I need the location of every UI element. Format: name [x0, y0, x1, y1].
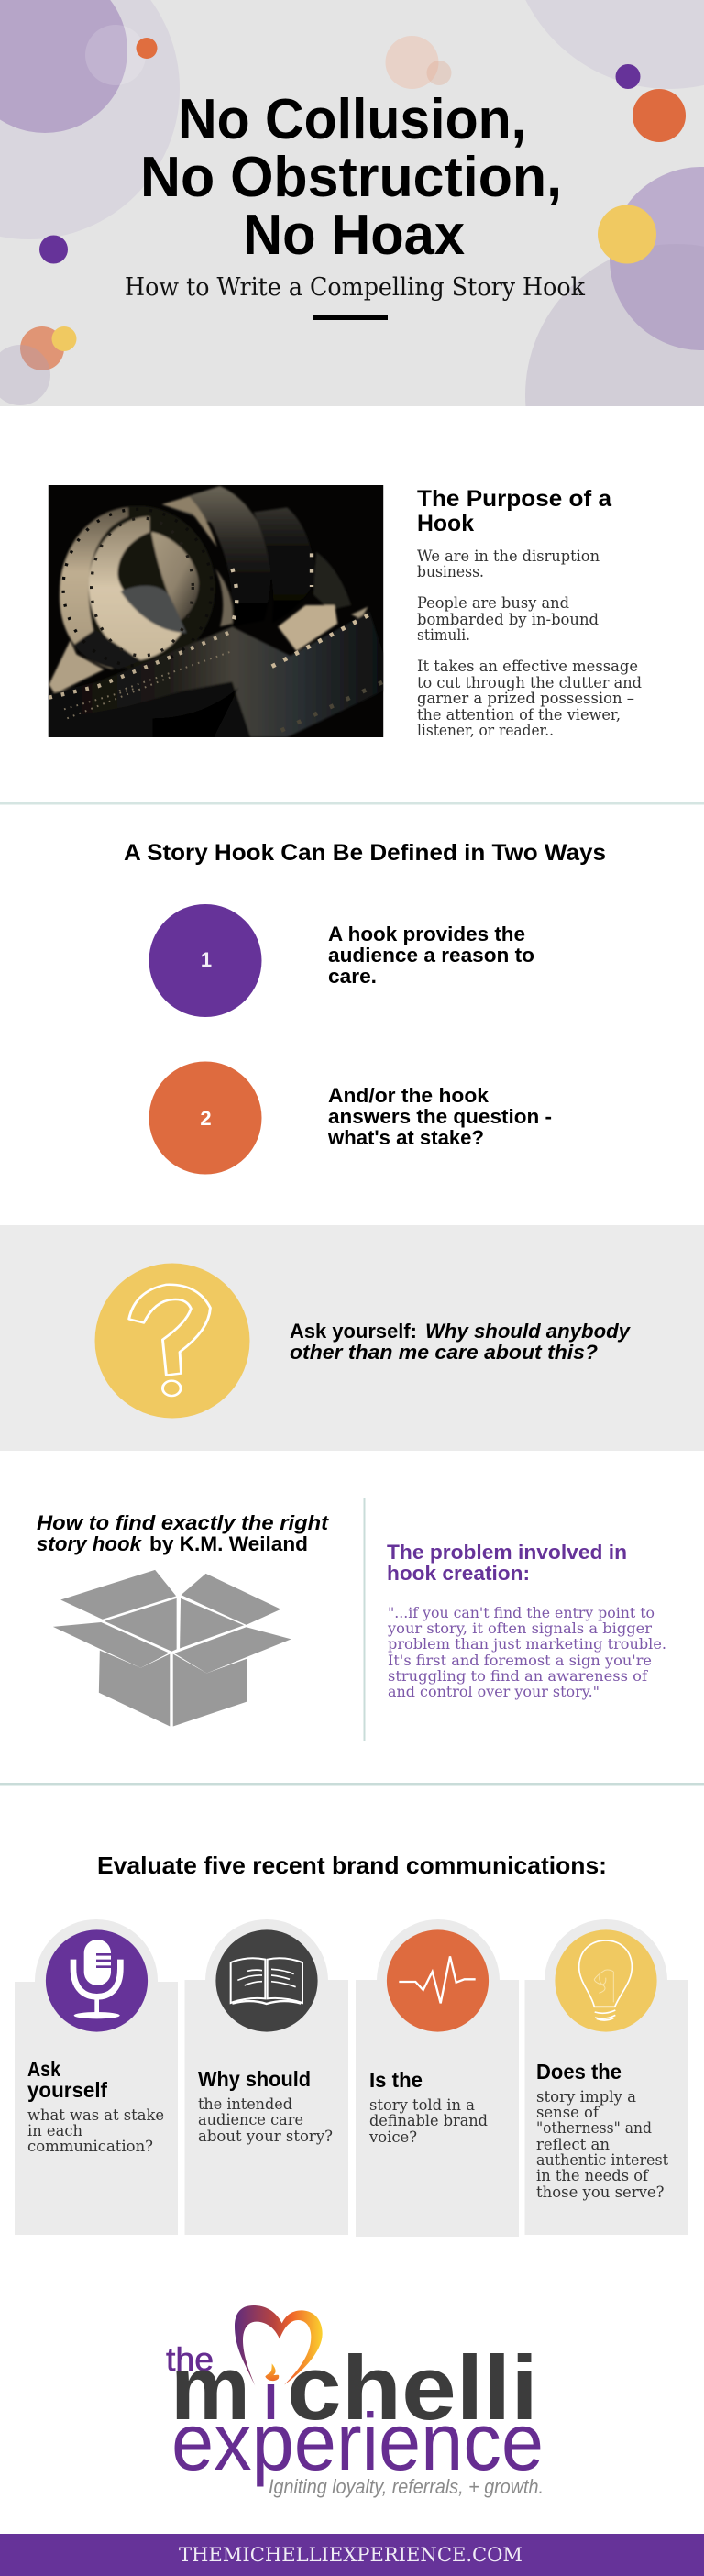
icon: open box	[53, 1570, 292, 1726]
callout text	[290, 1320, 632, 1364]
card 2 text: the intended	[198, 2095, 292, 2113]
point 1 text: A hook provides the	[328, 923, 525, 945]
card 4 text: those you serve?	[536, 2184, 665, 2201]
heading: the problem: hook creation:	[387, 1562, 530, 1585]
icon: light bulb	[579, 1940, 632, 2020]
body text: purpose: business.	[417, 563, 484, 580]
quote	[387, 1604, 666, 1700]
body text: purpose: listener, or reader..	[417, 722, 554, 739]
decorative bubbles	[0, 0, 704, 406]
logo tagline: Igniting loyalty, referrals, + growth.	[269, 2475, 544, 2498]
card 3 text	[368, 2068, 488, 2146]
icon: open book	[231, 1958, 302, 2004]
body text: purpose: the attention of the viewer,	[417, 706, 621, 724]
number badge 2	[148, 1062, 262, 1174]
subtitle: How to Write a Compelling Story Hook	[125, 273, 586, 302]
panel: purpose of a hook	[49, 485, 642, 739]
panel: ask yourself band	[0, 1225, 704, 1451]
heading: the problem: The problem involved in	[387, 1541, 627, 1564]
card 1	[15, 1919, 178, 2235]
heading: evaluate: Evaluate five recent brand communications:	[97, 1852, 607, 1879]
title	[140, 88, 562, 267]
card 1 text: Ask	[28, 2057, 60, 2081]
number badge 1: 1	[201, 948, 212, 971]
logo word: michelli: m	[170, 2337, 250, 2438]
body text: purpose	[417, 547, 642, 739]
footer bar	[0, 2534, 704, 2576]
quote: It's first and foremost a sign you're	[388, 1652, 652, 1669]
heading: the purpose of a hook: The Purpose of a	[417, 486, 612, 512]
logo letter i	[258, 2337, 284, 2438]
card 4 text: in the needs of	[536, 2167, 650, 2184]
point 2 text: And/or the hook	[328, 1084, 490, 1107]
card 3 text: Is the	[369, 2068, 423, 2092]
logo: the michelli experience	[166, 2305, 544, 2498]
point 2 text	[327, 1084, 552, 1149]
point 2 text: what's at stake?	[327, 1126, 484, 1149]
logo heart	[235, 2305, 323, 2386]
heading: the purpose of a hook	[417, 486, 612, 536]
card 1 text: what was at stake	[28, 2106, 164, 2124]
heading: the problem	[387, 1541, 627, 1585]
card 3 text: voice?	[368, 2128, 417, 2146]
point 1 text: audience a reason to	[328, 944, 534, 967]
card 2	[185, 1919, 348, 2235]
body text: purpose: We are in the disruption	[417, 547, 600, 565]
article title: How to find exactly the right	[37, 1511, 330, 1534]
article title: by K.M. Weiland	[149, 1532, 308, 1555]
card 1 text: communication?	[28, 2138, 153, 2155]
quote: and control over your story."	[388, 1683, 600, 1700]
logo flame	[265, 2363, 279, 2381]
card 3	[356, 1919, 519, 2237]
card 3 text: definable brand	[369, 2112, 488, 2129]
card 4 text: "otherness" and	[536, 2119, 652, 2137]
card 2 text: audience care	[198, 2111, 303, 2128]
film reel photo	[49, 485, 383, 737]
logo letter i: i	[264, 2337, 278, 2438]
number badge 2: 2	[200, 1107, 212, 1130]
body text: purpose: It takes an effective message	[417, 658, 638, 675]
body text: purpose: bombarded by in-bound	[417, 611, 599, 628]
point 1 text	[328, 923, 534, 988]
card 2 text: about your story?	[198, 2128, 333, 2145]
body text: purpose: People are busy and	[417, 594, 569, 612]
body text: purpose: garner a prized possession –	[417, 690, 634, 707]
body text: purpose: to cut through the clutter and	[417, 674, 642, 691]
card 1 text: yourself	[28, 2078, 107, 2102]
article title: story hook	[37, 1532, 143, 1555]
quote: your story, it often signals a bigger	[387, 1620, 652, 1637]
panel: header	[0, 0, 704, 406]
logo word: the: the	[166, 2340, 214, 2378]
icon: question mark	[95, 1264, 249, 1418]
footer url: THEMICHELLIEXPERIENCE.COM	[179, 2544, 522, 2566]
title: No Obstruction,	[140, 146, 562, 209]
number badge 1	[148, 904, 262, 1017]
card 4	[524, 1919, 688, 2235]
icon: pulse line	[399, 1956, 476, 2003]
icon: microphone	[73, 1940, 120, 2018]
heading: the purpose of a hook: Hook	[417, 511, 474, 536]
title: No Collusion,	[178, 88, 526, 151]
card 3 text: story told in a	[369, 2096, 475, 2114]
callout text: other than me care about this?	[290, 1341, 598, 1364]
card 4 text	[536, 2060, 668, 2201]
card 4 text: authentic interest	[536, 2151, 668, 2169]
quote: "...if you can't find the entry point to	[388, 1604, 654, 1621]
body text: purpose: stimuli.	[417, 626, 470, 644]
title rule	[314, 315, 388, 320]
card 1 text	[28, 2057, 164, 2155]
card 4 text: reflect an	[536, 2136, 610, 2153]
logo word: experience: experience	[171, 2396, 544, 2487]
card 2 text: Why should	[198, 2067, 311, 2091]
point 1 text: care.	[328, 965, 377, 988]
callout text: Why should anybody	[425, 1320, 632, 1343]
card 1 text: in each	[28, 2122, 82, 2139]
card 4 text: story imply a	[536, 2088, 636, 2106]
article title	[37, 1511, 330, 1555]
heading: two ways: A Story Hook Can Be Defined in Two Ways	[124, 840, 606, 866]
point 2 text: answers the question -	[328, 1105, 552, 1128]
title: No Hoax	[243, 204, 465, 267]
logo word: chelli: chelli	[287, 2337, 538, 2438]
panel: evaluate	[15, 1852, 688, 2237]
panel: two ways	[124, 840, 606, 1174]
callout text: Ask yourself:	[290, 1320, 417, 1343]
quote: problem than just marketing trouble.	[388, 1635, 666, 1653]
card 4 text: sense of	[536, 2104, 600, 2121]
card 2 text	[198, 2067, 333, 2145]
card 4 text: Does the	[536, 2060, 622, 2084]
panel: finding the hook	[37, 1498, 666, 1741]
quote: struggling to find an awareness of	[388, 1667, 648, 1685]
